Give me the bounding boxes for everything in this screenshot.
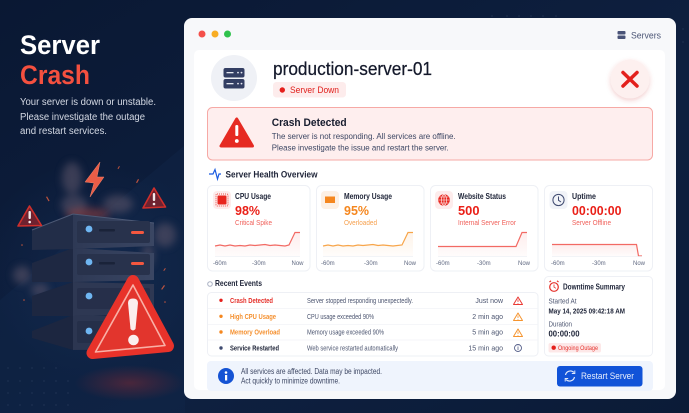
line chart: memory [321,232,417,267]
alert text: The server is not responding. All services are offline. [272,131,456,141]
server stack illustration [32,208,154,350]
servers menu [618,30,661,42]
info bar [207,361,653,391]
panel: application window [184,18,676,399]
icon: lightning bolt [85,162,104,197]
icon: left small warning triangle [18,206,42,226]
card: website status: Website Status [458,192,506,201]
line chart: memory: Now [404,261,417,267]
icon: large warning triangle [92,281,168,353]
event row: crash detected [219,297,523,305]
event row: memory overload: 5 min ago [472,330,503,336]
icon: server circle [211,55,257,101]
event row: service restarted: Service Restarted [230,346,279,352]
panel: downtime summary: 00:00:00 [548,328,580,338]
event row: high CPU usage: 2 min ago [472,314,503,321]
icon: right small warning triangle [143,188,166,208]
card: memory usage: 95% [344,203,369,218]
button: restart server [557,366,642,386]
line chart: uptime: -60m [551,261,565,267]
icon: CPU chip [213,191,231,209]
event row: memory overload: Memory Overload [230,330,280,336]
panel: downtime summary: Downtime Summary [563,282,625,292]
card: CPU usage [208,186,310,271]
badge: ongoing outage: Ongoing Outage [558,345,598,352]
alert panel: crash detected [208,108,652,160]
line chart: uptime [551,244,646,267]
heading: server health overview: Server Health Overview [226,170,318,180]
close button [610,60,650,98]
alert text: Please investigate the issue and restart the server. [272,142,449,152]
event row: memory overload: Memory usage exceeded 90% [307,330,384,336]
event row: high CPU usage: High CPU Usage [230,314,276,321]
panel: downtime summary: Started At [548,296,577,306]
card: website status: Internal Server Error [458,218,516,227]
icon: globe [435,191,453,209]
panel: downtime summary: May 14, 2025 09:42:18 AM [548,306,625,316]
card: memory usage: Overloaded [344,218,377,227]
line chart: website status: -30m [477,261,491,267]
icon: alert triangle [221,119,252,146]
line chart: memory: -30m [364,261,378,267]
alert text: Crash Detected [272,117,347,129]
icon: clock [550,191,568,209]
icon: info [218,368,234,384]
card: uptime: Server Offline [572,218,611,227]
description text [20,97,156,137]
card: memory usage: Memory Usage [344,192,392,201]
panel: recent events table [208,292,538,356]
event row: service restarted [219,344,522,352]
card: CPU usage: 98% [235,203,260,218]
status badge: server down: Server Down [290,85,339,95]
icon: alarm clock [550,281,558,291]
event row: service restarted: Web service restarted automatically [307,346,398,352]
card: CPU usage: CPU Usage [235,192,271,201]
event row: crash detected: Crash Detected [230,298,273,305]
info bar: Act quickly to minimize downtime. [241,377,340,386]
title: Server Crash: Crash [20,60,90,90]
event row: crash detected: Just now [475,298,504,305]
title: Server Crash [20,30,100,90]
event row: service restarted: 15 min ago [468,346,503,352]
description text: Please investigate the outage [20,112,145,123]
line chart: uptime: -30m [592,261,606,267]
line chart: uptime: Now [633,261,646,267]
card: uptime [544,186,652,271]
info bar: All services are affected. Data may be impacted. [241,367,382,376]
event row: memory overload [219,329,523,336]
line chart: memory: -60m [321,261,335,267]
panel: downtime summary: Duration [548,320,572,328]
server name heading: production-server-01 [273,58,432,79]
servers menu: Servers [631,30,661,42]
line chart: CPU: -30m [252,261,266,267]
icon: memory [321,191,339,209]
card: CPU usage: Critical Spike [235,218,272,227]
line chart: website status [436,232,531,267]
card: uptime: 00:00:00 [572,203,622,218]
button: restart server: Restart Server [581,371,634,381]
line chart: CPU [213,232,304,267]
event row: high CPU usage: CPU usage exceeded 90% [307,314,374,321]
panel: downtime summary [544,276,652,356]
line chart: website status: -60m [436,261,450,267]
card: website status: 500 [458,203,480,218]
status badge: server down [273,82,346,98]
description text: and restart services. [20,126,107,137]
alert text [272,117,456,152]
title: Server Crash: Server [20,30,100,60]
smoke clouds [13,162,176,297]
line chart: CPU: -60m [213,261,227,267]
line chart: website status: Now [518,261,531,267]
event row: crash detected: Server stopped responding unexpectedly. [307,298,413,305]
line chart: CPU: Now [292,261,304,267]
sparks [21,166,166,303]
window controls [198,30,231,38]
card: website status [430,186,538,271]
heading: recent events: Recent Events [215,278,262,288]
description text: Your server is down or unstable. [20,97,156,108]
card: uptime: Uptime [572,192,596,201]
event row: high CPU usage [219,313,523,321]
card: memory usage [316,186,424,271]
